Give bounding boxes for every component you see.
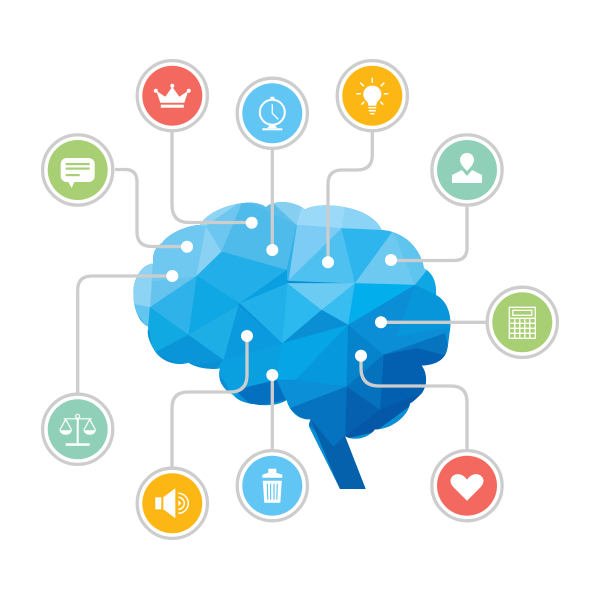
icon: speaker (137, 468, 207, 538)
icon: scales (43, 394, 113, 464)
icon: heart (432, 451, 502, 521)
icon: person (432, 135, 502, 205)
icon: clock (237, 78, 307, 148)
icon: calculator (487, 287, 557, 357)
icon: light bulb (337, 61, 407, 131)
icon: chat bubble (43, 135, 113, 205)
brain (133, 202, 450, 489)
icon: trash can (237, 451, 307, 521)
connector end dots (166, 217, 397, 381)
connector lines (78, 132, 486, 467)
icon: crown (137, 61, 207, 131)
